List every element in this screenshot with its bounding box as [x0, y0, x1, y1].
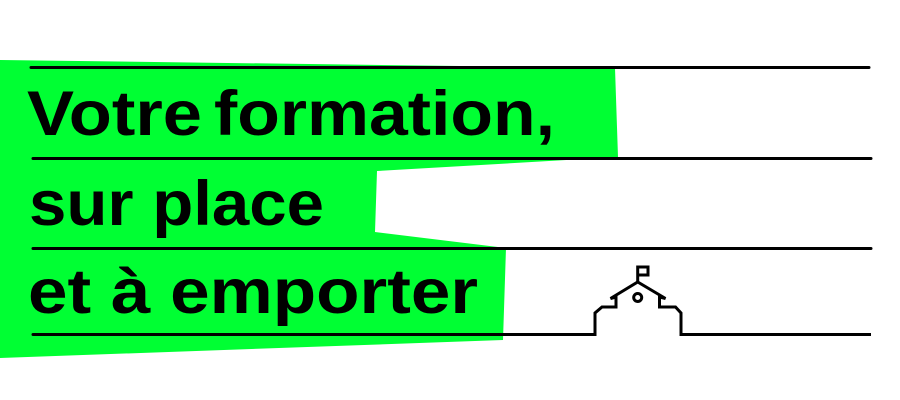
icon: school building on the baseline	[570, 267, 871, 334]
title: et à emporter	[28, 257, 478, 327]
title: formation,	[214, 79, 555, 149]
title: Votre	[27, 79, 202, 149]
horizontal ruled lines	[31, 68, 871, 334]
title: sur place	[29, 169, 324, 239]
title	[27, 79, 555, 327]
green highlight shape	[0, 60, 618, 358]
